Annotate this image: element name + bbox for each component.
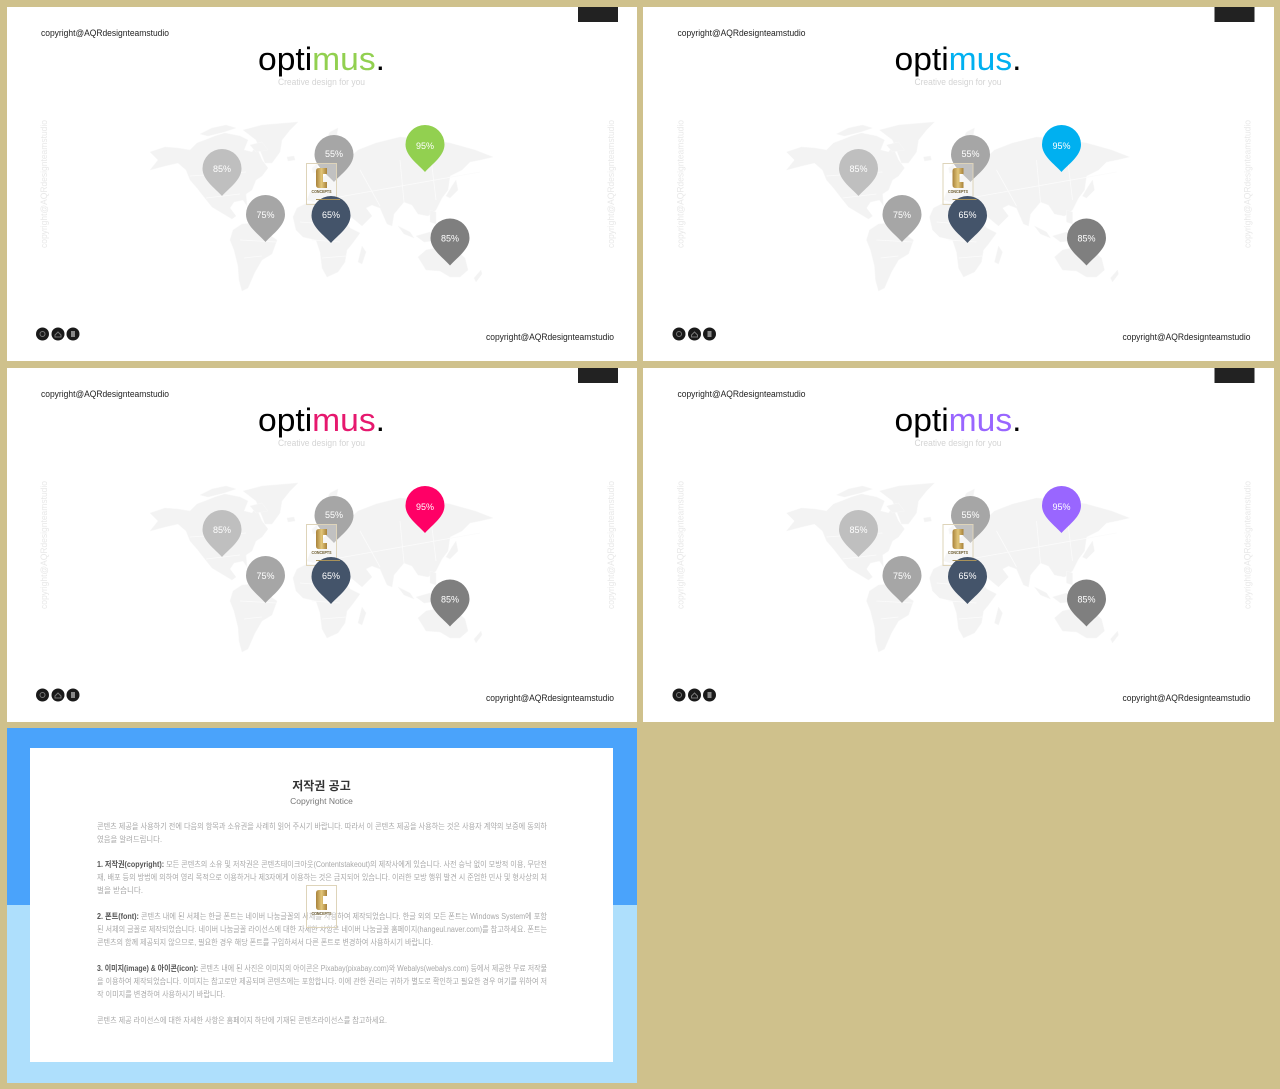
logo: CONCEPTS: [948, 550, 968, 555]
right watermark: copyright@AQRdesignteamstudio: [606, 481, 616, 609]
logo: [306, 164, 336, 204]
logo: [943, 524, 973, 566]
pin 85% dark: [430, 580, 470, 626]
world map: [150, 122, 493, 291]
pin 95%: [1042, 486, 1081, 533]
pin 85% dark: 85%: [1077, 234, 1096, 244]
right watermark: copyright@AQRdesignteamstudio: [606, 120, 616, 248]
icons: [672, 688, 716, 702]
tab: [1214, 368, 1254, 383]
pin 95%: [406, 486, 444, 533]
world map: [150, 483, 493, 652]
pin 55%: [951, 496, 990, 543]
pin 75%: 75%: [256, 210, 275, 220]
pin 65%: 65%: [958, 571, 977, 581]
left watermark: copyright@AQRdesignteamstudio: [676, 481, 686, 609]
section 1 copyright: [97, 859, 547, 895]
copyright top: copyright@AQRdesignteamstudio: [678, 389, 806, 399]
copyright top: copyright@AQRdesignteamstudio: [41, 389, 169, 399]
right watermark: copyright@AQRdesignteamstudio: [1242, 481, 1252, 609]
copyright bottom: copyright@AQRdesignteamstudio: [1122, 693, 1250, 703]
logo: CONCEPTS: [312, 189, 332, 194]
section 2 font: 2. 폰트(font): 콘텐츠 내에 된 서체는 한글 폰트는 네이버 나눔글꼴의 서체를 사용하여 제작되었습니다. 한글 외의 모든 폰트는 Windows System에 포함: [97, 911, 548, 921]
section 3 image and icon: [97, 963, 547, 999]
pin 65%: [312, 557, 350, 604]
pin 85%: 85%: [213, 164, 231, 174]
notice heading: 저작권 공고: [292, 778, 351, 793]
copyright top: copyright@AQRdesignteamstudio: [678, 28, 806, 38]
closing line: 콘텐츠 제공 라이선스에 대한 자세한 사항은 홈페이지 하단에 기재된 콘텐츠라이선스를 참고하세요.: [97, 1015, 387, 1025]
world map: [786, 122, 1130, 291]
logo: CONCEPTS: [948, 189, 968, 194]
intro text: 콘텐츠 제공을 사용하기 전에 다음의 항목과 소유권을 사례히 읽어 주시기 바랍니다. 따라서 이 콘텐츠 제공을 사용하는 것은 사용자 계약의 보증에 동의하: [97, 821, 548, 831]
title: optimus.: [894, 41, 1022, 77]
section 3 image and icon: 3. 이미지(image) & 아이콘(icon): 콘텐츠 내에 된 사진은 이미지의 아이콘은 Pixabay(pixabay.com)와 Webalys(webalys.com) 등에서 제공한 무료 저작물: [97, 963, 547, 973]
pin 55%: 55%: [961, 510, 980, 520]
tab: [578, 368, 618, 383]
title: optimus.: [258, 402, 385, 438]
copyright bottom: copyright@AQRdesignteamstudio: [486, 693, 614, 703]
intro text: 였음을 알려드립니다.: [97, 834, 162, 844]
pin 95%: 95%: [416, 141, 434, 151]
subtitle: Creative design for you: [278, 77, 365, 87]
pin 55%: 55%: [961, 149, 980, 159]
pin 85%: [839, 149, 878, 196]
title: optimus.: [894, 402, 1022, 438]
pin 85% dark: 85%: [1077, 594, 1096, 604]
panel: slide 1 green: [7, 7, 637, 361]
copyright bottom: copyright@AQRdesignteamstudio: [486, 332, 614, 342]
section 1 copyright: 1. 저작권(copyright): 모든 콘텐츠의 소유 및 저작권은 콘텐츠테이크아웃(Contentstakeout)의 제작사에게 있습니다. 사전 승낙 없이 모방적 이용, 무단전: [97, 859, 547, 869]
icons: [672, 328, 716, 340]
pin 85% dark: 85%: [441, 234, 459, 244]
left watermark: copyright@AQRdesignteamstudio: [676, 120, 686, 248]
pin 85%: 85%: [849, 164, 868, 174]
icons: [36, 688, 80, 702]
pin 55%: 55%: [325, 510, 343, 520]
section 3 image and icon: 작 이미지를 변경하여 사용하시기 바랍니다.: [97, 989, 225, 999]
pin 65%: [312, 196, 350, 243]
pin 75%: [246, 195, 285, 242]
pin 85% dark: [1067, 218, 1106, 266]
logo: [306, 886, 336, 928]
pin 95%: [406, 125, 444, 172]
pin 65%: 65%: [322, 571, 340, 581]
notice subheading: Copyright Notice: [290, 796, 353, 806]
logo: [943, 164, 973, 204]
tab: [578, 7, 618, 22]
logo: CONCEPTS: [312, 550, 332, 555]
subtitle: Creative design for you: [914, 77, 1002, 87]
pin 85%: [202, 149, 242, 196]
pin 65%: [948, 196, 987, 243]
subtitle: Creative design for you: [914, 438, 1002, 448]
section 1 copyright: 벌을 받습니다.: [97, 885, 143, 895]
pin 75%: 75%: [893, 571, 911, 581]
pin 95%: 95%: [1052, 502, 1071, 512]
pin 75%: 75%: [256, 571, 275, 581]
pin 65%: [948, 557, 987, 604]
pin 85%: 85%: [849, 525, 868, 535]
left watermark: copyright@AQRdesignteamstudio: [39, 481, 49, 609]
logo: [306, 524, 336, 566]
pin 65%: 65%: [322, 210, 340, 220]
section 2 font: 된 서체의 글꼴로 제작되었습니다. 네이버 나눔글꼴 라이선스에 대한 자세한 사항은 네이버 나눔글꼴 홈페이지(hangeul.naver.com)를 참고하세요. 폰트는: [97, 924, 547, 934]
section 2 font: [97, 911, 548, 947]
world map: [786, 483, 1130, 652]
pin 55%: [951, 135, 990, 182]
section 2 font: 콘텐츠의 함께 제공되지 않으므로, 필요한 경우 해당 폰트를 구입하셔서 다른 폰트로 변경하여 사용하시기 바랍니다.: [97, 937, 433, 947]
copyright bottom: copyright@AQRdesignteamstudio: [1122, 332, 1250, 342]
subtitle: Creative design for you: [278, 438, 365, 448]
pin 55%: [314, 135, 354, 182]
pin 95%: 95%: [416, 502, 434, 512]
pin 75%: [882, 195, 922, 242]
pin 55%: 55%: [325, 149, 343, 159]
pin 95%: 95%: [1052, 141, 1071, 151]
right watermark: copyright@AQRdesignteamstudio: [1242, 120, 1252, 248]
pin 75%: [882, 556, 922, 603]
section 3 image and icon: 을 이용하여 제작되었습니다. 이미지는 참고로만 제공되며 콘텐츠에는 포함합니다. 이에 관한 권리는 귀하가 별도로 확인하고 필요한 경우 여기를 위하여 저: [97, 976, 547, 986]
pin 85% dark: 85%: [441, 594, 459, 604]
pin 85%: 85%: [213, 525, 231, 535]
tab: [1214, 7, 1254, 22]
icons: [36, 328, 80, 340]
pin 75%: 75%: [893, 210, 911, 220]
title: optimus.: [258, 41, 385, 77]
copyright top: copyright@AQRdesignteamstudio: [41, 28, 169, 38]
pin 75%: [246, 556, 285, 603]
left watermark: copyright@AQRdesignteamstudio: [39, 120, 49, 248]
panel: slide 4 purple: [643, 368, 1274, 722]
pin 65%: 65%: [958, 210, 977, 220]
pin 85% dark: [1067, 580, 1106, 626]
pin 85% dark: [430, 218, 470, 266]
pin 55%: [314, 496, 354, 543]
section 1 copyright: 재, 배포 등의 방법에 의하여 영리 목적으로 이용하거나 제3자에게 이용하는 것은 금지되어 있습니다. 이러한 모방 행위 발견 시 준엄한 민사 및 형사상의 처: [97, 872, 547, 882]
panel: slide 2 blue: [643, 7, 1274, 361]
pin 85%: [202, 510, 242, 557]
pin 95%: [1042, 125, 1081, 172]
logo: CONCEPTS: [312, 911, 332, 916]
panel: slide 3 pink: [7, 368, 637, 722]
intro text: [97, 821, 548, 844]
panel: copyright notice slide: [7, 728, 637, 1083]
pin 85%: [839, 510, 878, 557]
